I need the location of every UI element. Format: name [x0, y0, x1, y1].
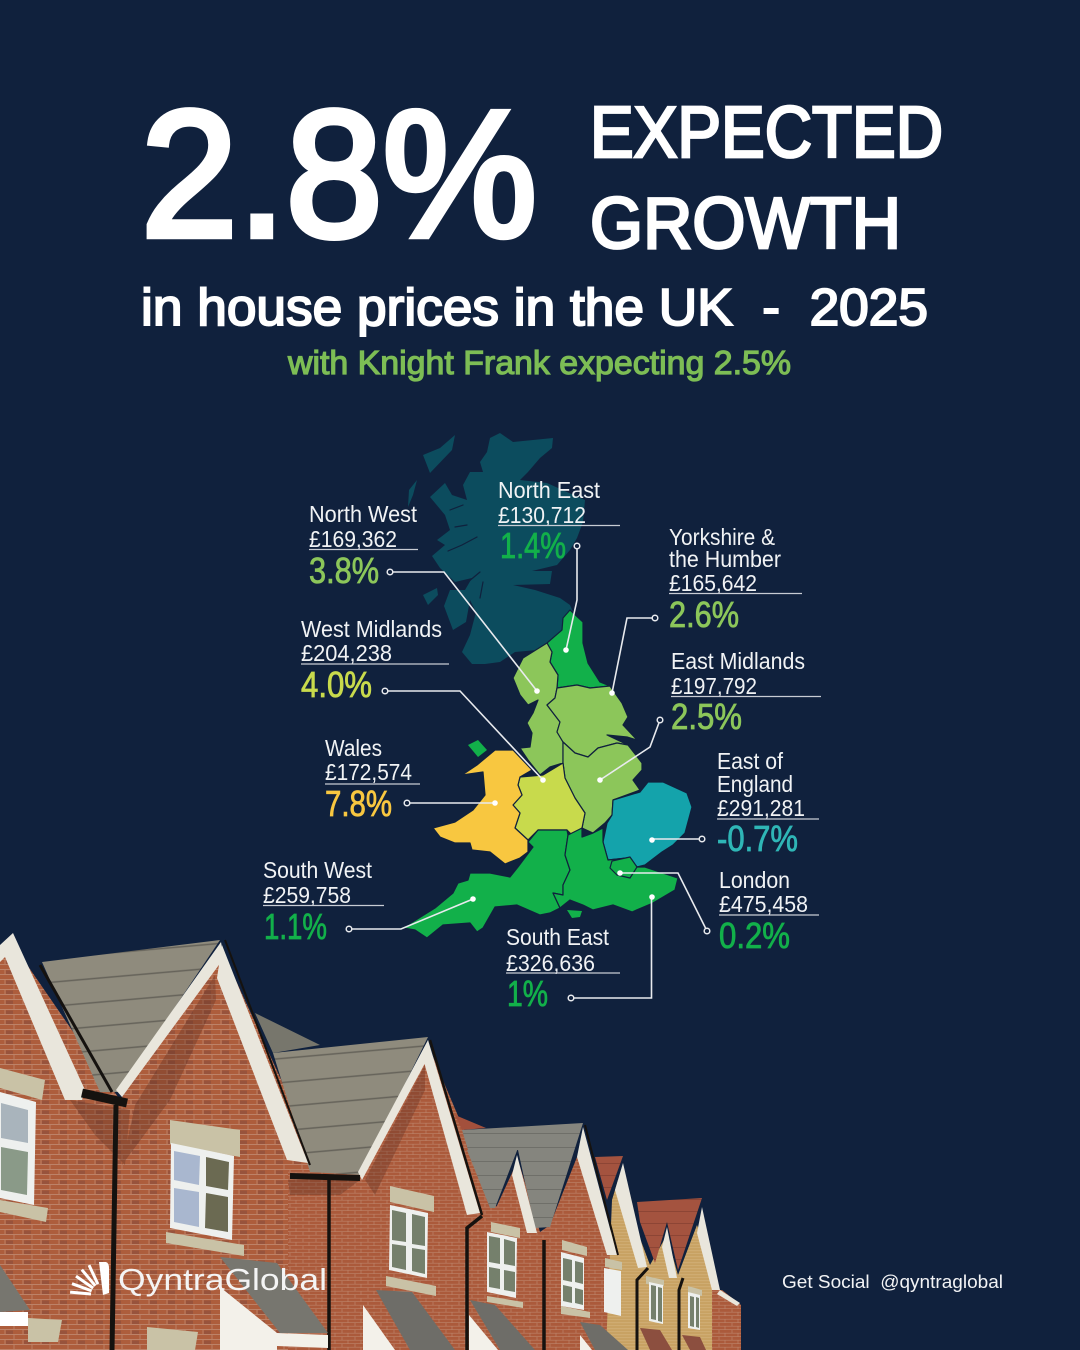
region: Scotland — [408, 433, 585, 664]
connector: South West — [346, 896, 476, 932]
label: Yorkshire and the Humber: the Humber — [669, 546, 781, 572]
region: Wales — [433, 750, 532, 864]
connector: South East — [568, 894, 655, 1001]
Scottish sea lochs — [448, 505, 483, 598]
label: East Midlands: £197,792 — [671, 673, 757, 699]
label: North East: 1.4% — [500, 525, 566, 566]
connector: London — [617, 870, 710, 934]
label: East of England: -0.7% — [717, 818, 798, 859]
region: South East — [553, 828, 678, 912]
headline figure: 2.8% — [141, 74, 537, 275]
region: East of England — [603, 782, 692, 867]
label: East Midlands: 2.5% — [671, 696, 742, 737]
wall shadows — [70, 975, 425, 1195]
window sills and lintels — [0, 1068, 702, 1318]
label: West Midlands — [301, 616, 449, 705]
label: North West: North West — [309, 501, 418, 527]
region: Isle of Wight — [567, 910, 582, 918]
region: North West — [513, 643, 563, 775]
label: South East: 1% — [507, 973, 548, 1014]
label: South West: 1.1% — [264, 906, 327, 947]
label: London: 0.2% — [719, 915, 790, 956]
terraced houses photo — [0, 933, 741, 1350]
tan walls — [606, 1180, 722, 1350]
label: East of England — [717, 748, 819, 859]
porch roofs — [0, 1257, 706, 1350]
back roof — [255, 1013, 320, 1053]
headline words: EXPECTED — [590, 93, 943, 173]
label: South East: £326,636 — [506, 950, 595, 976]
label: Yorkshire and the Humber — [669, 524, 802, 635]
subtitle: in house prices in the UK - 2025 — [141, 279, 928, 337]
label: West Midlands: 4.0% — [301, 664, 372, 705]
end brick wall — [712, 1290, 741, 1350]
label: East of England: England — [717, 771, 793, 797]
label: North West: 3.8% — [309, 550, 379, 591]
label: South East: South East — [506, 924, 610, 950]
label: South West: South West — [263, 857, 373, 883]
connector: East of England — [649, 836, 705, 843]
logo fan icon — [70, 1262, 109, 1295]
roofs — [42, 940, 220, 1092]
dark gutters and downpipes — [40, 940, 683, 1350]
sub-subtitle: with Knight Frank expecting 2.5% — [287, 344, 791, 381]
label: Wales — [325, 735, 420, 824]
label: Wales: Wales — [325, 735, 382, 761]
label: London: London — [719, 867, 790, 893]
connector: Wales — [404, 800, 498, 806]
region: North East — [547, 610, 610, 688]
headline words — [590, 93, 943, 264]
connector: East Midlands — [597, 717, 663, 783]
connector: West Midlands — [382, 688, 546, 783]
label: London — [719, 867, 819, 956]
label: South West: £259,758 — [263, 882, 351, 908]
headline — [141, 74, 943, 275]
connector lines — [346, 543, 710, 1001]
small red roof — [455, 1115, 486, 1130]
label: North East — [498, 477, 620, 566]
label: Wales: 7.8% — [325, 783, 392, 824]
UK map — [403, 433, 692, 938]
region: Yorkshire and the Humber — [547, 685, 637, 757]
white bargeboards — [0, 933, 740, 1306]
label: Yorkshire and the Humber: 2.6% — [669, 594, 739, 635]
connector: Yorkshire — [609, 615, 658, 696]
label: East of England: East of — [717, 748, 784, 774]
label: Yorkshire and the Humber: £165,642 — [669, 570, 757, 596]
label: Yorkshire and the Humber: Yorkshire & — [669, 524, 775, 550]
middle brick walls — [462, 1157, 622, 1350]
label: South East — [506, 924, 620, 1014]
logo: QyntraGlobal — [70, 1262, 327, 1297]
label: North East: £130,712 — [498, 502, 586, 528]
label: South West — [263, 857, 384, 947]
social handle: Get Social @qyntraglobal — [782, 1272, 1003, 1292]
label: London: £475,458 — [719, 891, 808, 917]
label: North West — [309, 501, 418, 591]
region: West Midlands — [513, 763, 585, 840]
region: Anglesey — [468, 740, 487, 757]
label: North West: £169,362 — [309, 526, 397, 552]
label: West Midlands: £204,238 — [301, 640, 392, 666]
connector: North West — [387, 569, 540, 694]
label: West Midlands: West Midlands — [301, 616, 442, 642]
label: North East: North East — [498, 477, 601, 503]
brick walls: near houses — [0, 940, 320, 1350]
region: London — [610, 857, 637, 878]
window panes — [1, 1103, 699, 1328]
label: East Midlands: East Midlands — [671, 648, 805, 674]
connector: North East — [563, 543, 580, 653]
region: South West — [403, 830, 570, 938]
windows — [0, 1092, 700, 1330]
label: East Midlands — [671, 648, 821, 737]
label: Wales: £172,574 — [325, 759, 412, 785]
headline words: GROWTH — [590, 184, 901, 264]
logo wordmark: QyntraGlobal — [118, 1262, 327, 1297]
label: East of England: £291,281 — [717, 795, 805, 821]
region: East Midlands — [563, 742, 642, 833]
